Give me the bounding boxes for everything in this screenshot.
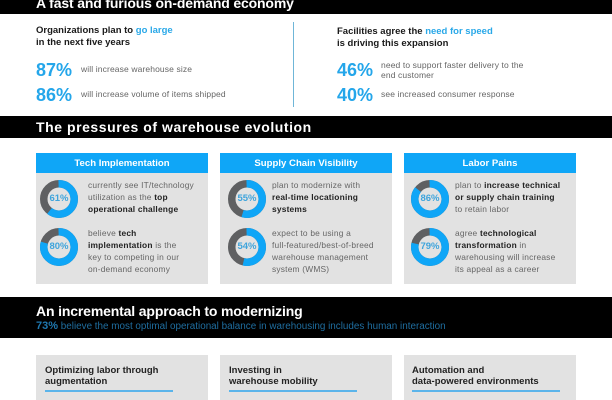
text: real-time locationing: plan to modernize with — [272, 180, 360, 190]
text: tech implementation: implementation is the — [88, 240, 176, 250]
card heading: Tech Implementation — [74, 158, 170, 169]
donut: 61%: 61% — [49, 193, 68, 204]
panel: augmentation — [36, 355, 208, 400]
card title: augmentation — [45, 376, 107, 386]
banner: incremental approach — [0, 297, 612, 338]
donut: 80%: 80% — [49, 241, 68, 252]
stat text: items shipped: will increase volume of items shipped — [81, 89, 226, 99]
panel: labor pains — [404, 153, 576, 284]
text: WMS: warehouse management — [272, 252, 368, 262]
text: technological transformation: its appeal as a career — [455, 264, 539, 274]
text: technological transformation: transformation in — [455, 240, 526, 250]
stat text: faster delivery — [381, 60, 524, 80]
donut: 79% — [411, 228, 449, 266]
donut: 79%: 79% — [420, 241, 440, 252]
panel: go large — [36, 25, 226, 105]
stat: 87%: 87% — [36, 60, 72, 80]
accent rule — [45, 390, 173, 392]
stat text: warehouse size: will increase warehouse size — [81, 64, 192, 74]
donut: 55% — [228, 180, 266, 218]
stat: 46%: 46% — [337, 60, 373, 80]
stat text: faster delivery: need to support faster delivery to the — [381, 60, 524, 70]
text: technological transformation: agree technological — [455, 228, 537, 238]
text: training: plan to increase technical — [455, 180, 560, 190]
text: tech implementation: believe tech — [88, 228, 136, 238]
divider between stat panels — [293, 22, 294, 107]
text: WMS: full-featured/best-of-breed — [272, 240, 374, 250]
text: tech implementation: key to competing in our — [88, 252, 179, 262]
donut: 54% — [228, 228, 266, 266]
subheading: go large: Organizations plan to go large — [36, 25, 173, 36]
donut: 61% — [40, 180, 78, 218]
text: technological transformation: warehousing will increase — [455, 252, 555, 262]
subheading: go large: in the next five years — [36, 37, 130, 48]
panel: supply chain visibility — [220, 153, 392, 284]
card title: Automation and — [412, 365, 484, 376]
accent rule — [412, 390, 560, 392]
text: top challenge: operational challenge — [88, 204, 178, 214]
heading: incremental approach: An incremental approach to modernizing — [36, 303, 303, 319]
card title: Investing in — [229, 365, 282, 376]
stat: 40%: 40% — [337, 85, 373, 105]
card heading — [36, 153, 208, 173]
panel: need for speed — [337, 26, 524, 105]
card title: data-powered environments — [412, 376, 539, 386]
text: training: or supply chain training — [455, 192, 555, 202]
panel: data-powered environments — [404, 355, 576, 400]
heading: pressures: The pressures of warehouse evolution — [36, 119, 312, 135]
subheading: need for speed: Facilities agree the need for speed — [337, 26, 493, 37]
text: training — [455, 180, 560, 214]
stat text: consumer response: see increased consumer response — [381, 89, 515, 99]
text: real-time locationing — [272, 180, 360, 214]
card title — [45, 365, 158, 386]
panel: tech implementation — [36, 153, 208, 284]
card heading — [404, 153, 576, 173]
panel: warehouse mobility — [220, 355, 392, 400]
donut: 54%: 54% — [237, 241, 256, 252]
donut: 86%: 86% — [420, 193, 440, 204]
subheading: go large — [36, 25, 173, 48]
stat text: faster delivery: end customer — [381, 70, 434, 80]
text: WMS: system (WMS) — [272, 264, 329, 274]
text: top challenge: utilization as the top — [88, 192, 168, 202]
banner: on-demand economy — [0, 0, 612, 14]
text: top challenge — [88, 180, 194, 214]
card title — [412, 365, 539, 386]
card title: warehouse mobility — [229, 376, 318, 386]
text: technological transformation — [455, 228, 555, 274]
donut: 55%: 55% — [237, 193, 256, 204]
text: training: to retain labor — [455, 204, 509, 214]
text: tech implementation: on-demand economy — [88, 264, 170, 274]
text: real-time locationing: real-time locationing — [272, 192, 358, 202]
subheading: need for speed — [337, 26, 493, 49]
card title — [229, 365, 318, 386]
card heading — [220, 153, 392, 173]
text: WMS — [272, 228, 374, 274]
card heading: Supply Chain Visibility — [254, 158, 358, 169]
text: WMS: expect to be using a — [272, 228, 351, 238]
donut: 80% — [40, 228, 78, 266]
banner: pressures — [0, 116, 612, 138]
card heading: Labor Pains — [463, 158, 517, 169]
text: tech implementation — [88, 228, 179, 274]
card title: Optimizing labor through — [45, 365, 158, 376]
text: top challenge: currently see IT/technology — [88, 180, 194, 190]
text: real-time locationing: systems — [272, 204, 307, 214]
donut: 86% — [411, 180, 449, 218]
stat: 73% human interaction: 73% believe the most optimal operational balance in warehousing includes human interaction — [36, 320, 446, 332]
stat: 86%: 86% — [36, 85, 72, 105]
accent rule — [229, 390, 357, 392]
subheading: need for speed: is driving this expansion — [337, 38, 448, 49]
